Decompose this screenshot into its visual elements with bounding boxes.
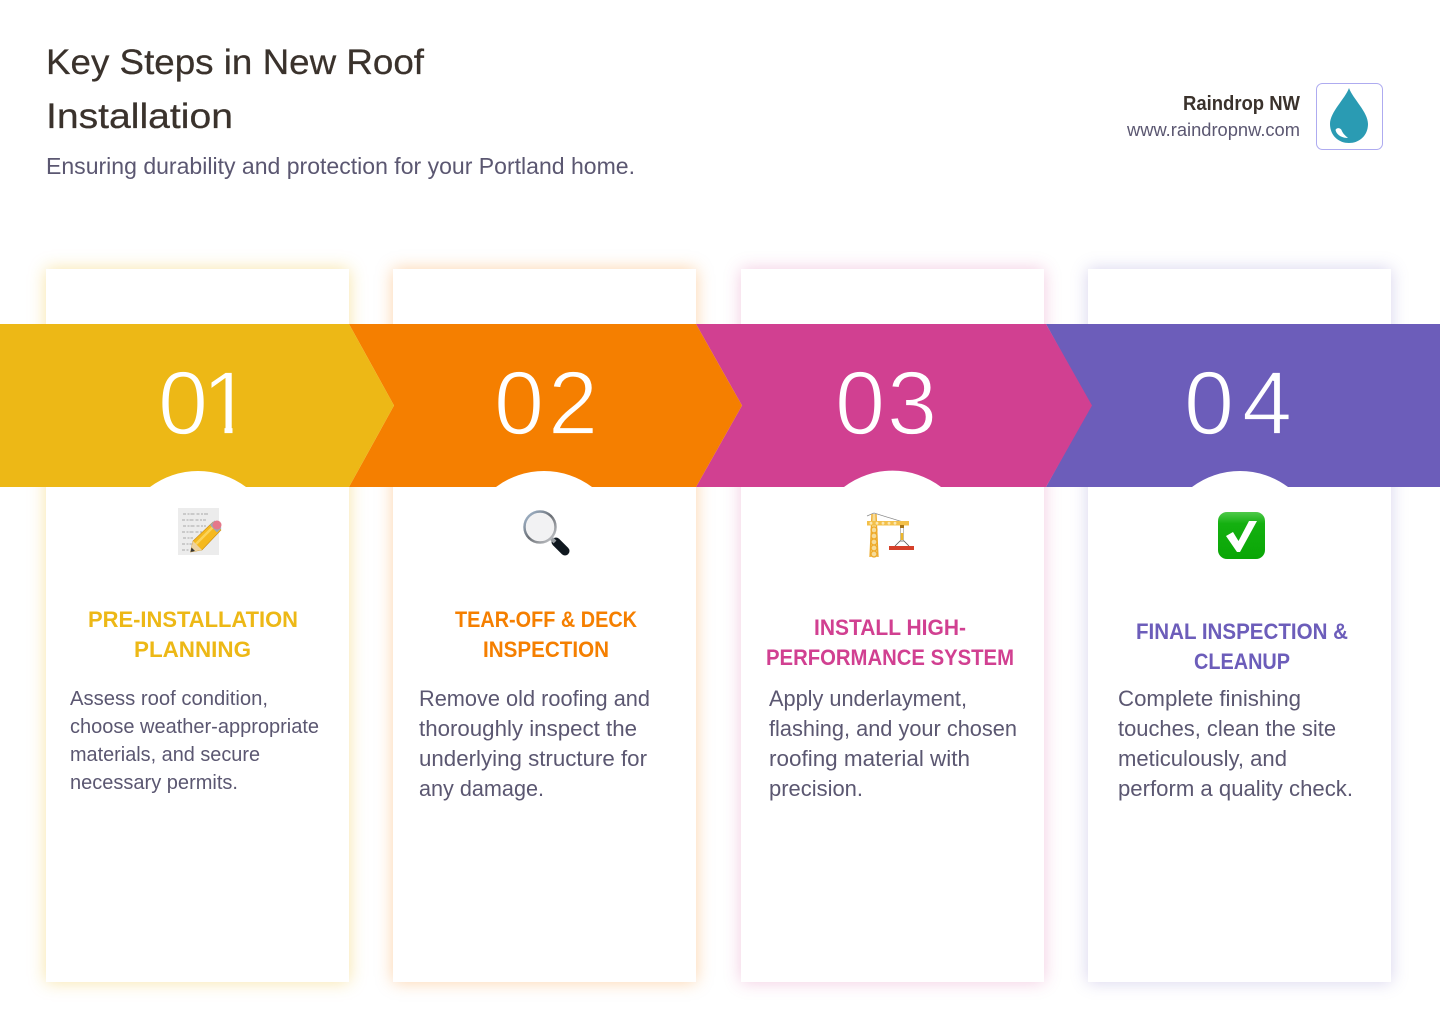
body text: materials, and secure bbox=[70, 744, 260, 766]
title: Key Steps in New Roof bbox=[46, 43, 424, 82]
heading bbox=[88, 607, 298, 662]
body text: roofing material with bbox=[769, 746, 970, 771]
chevron: step 2: 02 bbox=[494, 354, 598, 454]
body text: necessary permits. bbox=[70, 772, 238, 794]
arc notch bbox=[150, 471, 246, 487]
icon: magnifying glass bbox=[524, 512, 565, 551]
heading bbox=[766, 615, 1014, 670]
body text: Apply underlayment, bbox=[769, 686, 967, 711]
heading bbox=[1136, 619, 1348, 674]
panel: step 2 card bbox=[393, 269, 696, 982]
heading: TEAR-OFF & DECK bbox=[455, 607, 637, 632]
body text: any damage. bbox=[419, 776, 544, 801]
body text: choose weather-appropriate bbox=[70, 716, 319, 738]
body text: precision. bbox=[769, 776, 863, 801]
heading: PRE-INSTALLATION bbox=[88, 607, 298, 632]
chevron: step 3 bbox=[696, 324, 1092, 487]
body text bbox=[70, 688, 319, 794]
arc notch bbox=[844, 471, 941, 487]
brand block bbox=[1126, 83, 1383, 150]
subtitle: Ensuring durability and protection for your Portland home. bbox=[46, 153, 635, 179]
arc notch bbox=[496, 471, 592, 487]
chevron: step 3: 03 bbox=[835, 354, 937, 454]
icon: logo water drop bbox=[1316, 84, 1382, 150]
header: title and subtitle bbox=[46, 43, 635, 179]
heading: FINAL INSPECTION & bbox=[1136, 619, 1348, 644]
chevron band with step numbers bbox=[0, 324, 1440, 487]
body text: perform a quality check. bbox=[1118, 776, 1353, 801]
icon: building crane bbox=[867, 513, 914, 557]
panel: step 4 card bbox=[1088, 269, 1391, 982]
body text: Remove old roofing and bbox=[419, 686, 650, 711]
title: Installation bbox=[46, 97, 233, 136]
body text: meticulously, and bbox=[1118, 746, 1287, 771]
heading: CLEANUP bbox=[1194, 649, 1290, 674]
body text bbox=[1118, 686, 1353, 801]
body text: Complete finishing bbox=[1118, 686, 1301, 711]
body text: thoroughly inspect the bbox=[419, 716, 637, 741]
heading bbox=[455, 607, 637, 662]
body text: flashing, and your chosen bbox=[769, 716, 1017, 741]
panel: step 1 card bbox=[46, 269, 349, 982]
panel: step 3 card bbox=[741, 269, 1044, 982]
chevron: step 1: 01 bbox=[158, 354, 252, 454]
arc notch bbox=[1192, 471, 1288, 487]
chevron: step 1 bbox=[0, 324, 394, 487]
icon: green check mark bbox=[1218, 512, 1265, 559]
brand url: www.raindropnw.com bbox=[1126, 119, 1300, 140]
body text bbox=[419, 686, 650, 801]
chevron: step 4: 04 bbox=[1184, 354, 1292, 454]
body text bbox=[769, 686, 1017, 801]
heading: INSTALL HIGH- bbox=[814, 615, 966, 640]
body text: Assess roof condition, bbox=[70, 688, 268, 710]
heading: PERFORMANCE SYSTEM bbox=[766, 645, 1014, 670]
title bbox=[46, 43, 424, 136]
heading: PLANNING bbox=[134, 637, 251, 662]
icon: memo and pencil bbox=[178, 508, 222, 555]
body text: touches, clean the site bbox=[1118, 716, 1336, 741]
brand name: Raindrop NW bbox=[1183, 93, 1300, 115]
chevron: step 4 bbox=[1046, 324, 1440, 487]
chevron: step 2 bbox=[349, 324, 742, 487]
heading: INSPECTION bbox=[483, 637, 609, 662]
body text: underlying structure for bbox=[419, 746, 648, 771]
